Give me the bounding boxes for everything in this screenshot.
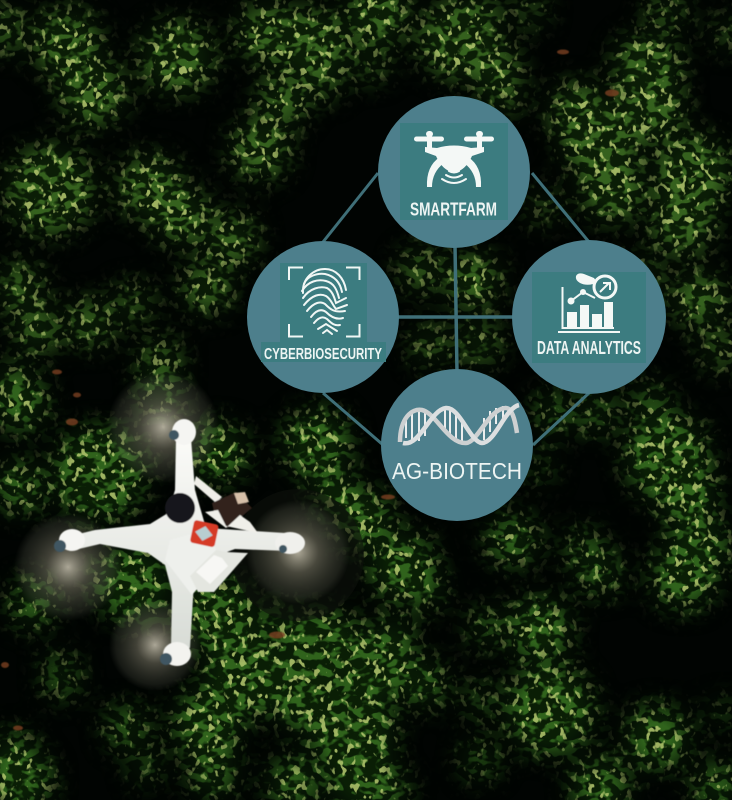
rotor blur: bottom: [109, 599, 201, 691]
label: data analytics: DATA ANALYTICS: [537, 338, 641, 358]
camera: [165, 493, 195, 523]
background: dry leaf spots: [1, 50, 619, 730]
drone: [14, 371, 364, 691]
rotor blur: left: [14, 513, 122, 621]
motors: [54, 430, 287, 665]
label: smartfarm: SMARTFARM: [410, 200, 497, 220]
rotor blur: right: [232, 489, 364, 621]
label: ag-biotech: AG-BIOTECH: [392, 458, 522, 484]
red module: [190, 520, 219, 547]
rotor blur: top: [107, 371, 219, 483]
panel: cyberbiosecurity node: [247, 241, 399, 393]
panel: smartfarm node: [378, 96, 530, 248]
label: cyberbiosecurity: CYBERBIOSECURITY: [264, 346, 382, 363]
rear battery: [190, 550, 248, 592]
icon: farm drone: [414, 131, 494, 187]
panel: ag-biotech node: [381, 369, 533, 521]
icon: fingerprint scan: [289, 268, 360, 336]
drone body and arms: [54, 419, 305, 666]
icon: dna helix: [400, 405, 519, 443]
connector lines between circles: [323, 173, 589, 445]
icon: chart with magnifier: [558, 273, 620, 333]
sensor box: [212, 492, 252, 528]
panel: data analytics node: [512, 240, 666, 394]
